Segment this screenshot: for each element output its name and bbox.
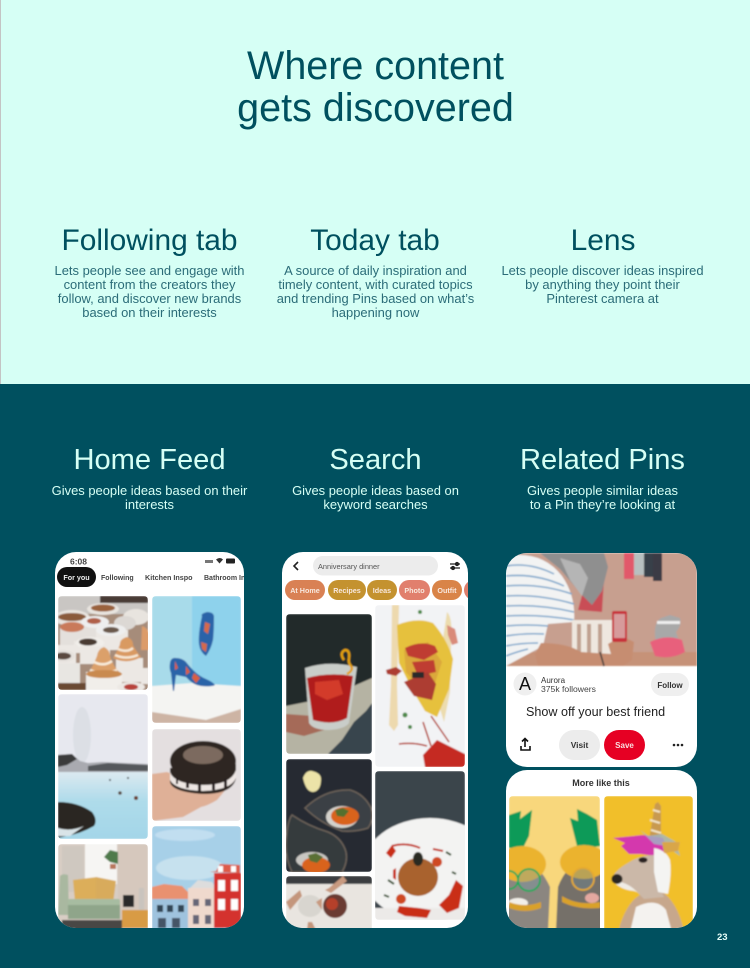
- save button: [604, 730, 645, 760]
- phone: Related Pins more like this card: [498, 770, 697, 932]
- text: Related Pins description: [527, 483, 678, 512]
- page number: 23: [717, 932, 728, 943]
- text: Today tab description: and trending Pins based on what’s: [277, 291, 474, 306]
- back arrow icon: [294, 562, 298, 570]
- text: Related Pins description: Gives people similar ideas: [527, 483, 678, 498]
- text: Following tab description: follow, and discover new brands: [58, 291, 241, 306]
- phone mockups: [55, 552, 697, 928]
- heading: Search: Search: [329, 444, 422, 476]
- photo: spaghetti plate: [375, 771, 465, 920]
- text: Today tab description: happening now: [332, 305, 419, 320]
- text: Home Feed description: Gives people ideas based on their: [52, 483, 247, 498]
- text: Following tab description: [55, 263, 244, 320]
- category chips: Photo: [404, 586, 425, 595]
- filter icon: [450, 562, 460, 570]
- text: Home Feed description: interests: [125, 497, 174, 512]
- text: Search description: Gives people ideas based on: [292, 483, 459, 498]
- category chips: Ideas: [373, 586, 391, 595]
- heading: Today tab: Today tab: [310, 224, 440, 257]
- creator row: A: [519, 674, 531, 694]
- tab bar: Following: [101, 575, 134, 582]
- text: Lens description: by anything they point their: [525, 277, 680, 292]
- phone: Search: [282, 552, 468, 928]
- category chips: At Home: [290, 586, 320, 595]
- category chips: Recipes: [333, 586, 361, 595]
- text: Home Feed description: [52, 483, 248, 512]
- tab bar: Bathroom Ins: [204, 575, 249, 582]
- photo: living room: [58, 844, 148, 934]
- category chips: [285, 580, 484, 600]
- category chips: Outfit: [437, 586, 457, 595]
- search bar: Anniversary dinner: [318, 562, 380, 571]
- photo: sharing table: [286, 876, 372, 932]
- photo: colorful town: [152, 826, 241, 934]
- text: Lens description: [501, 263, 704, 306]
- text: Following tab description: content from the creators they: [64, 277, 235, 292]
- tab bar: Kitchen Inspo: [145, 573, 193, 582]
- photo: lobster pasta: [375, 605, 465, 767]
- heading: Related Pins: Related Pins: [520, 444, 685, 476]
- phone: Home Feed: [51, 552, 249, 934]
- follow button: [651, 673, 689, 696]
- text: Lens description: Pinterest camera at: [546, 291, 659, 306]
- photo: blue lagoon: [58, 694, 148, 839]
- tab bar: For you: [63, 573, 90, 582]
- heading: Following tab: Following tab: [61, 224, 238, 257]
- text: Following tab description: based on their interests: [82, 305, 217, 320]
- photo: pineapple kittens: [509, 796, 600, 928]
- share icon: [521, 738, 530, 750]
- more icon: [673, 744, 683, 746]
- title: gets discovered: [237, 86, 514, 130]
- save button: Save: [615, 741, 634, 750]
- text: Search description: [292, 483, 459, 512]
- photo: red cocktail: [286, 614, 372, 754]
- text: Lens description: Lets people discover ideas inspired: [501, 263, 704, 278]
- photo: unicorn dog: [604, 796, 693, 932]
- status bar: [70, 558, 235, 564]
- title: [237, 44, 514, 130]
- dark background panel: [0, 384, 750, 968]
- text: Today tab description: timely content, with curated topics: [278, 277, 473, 292]
- photo: cupcakes: [58, 596, 148, 690]
- status bar: 6:08: [70, 556, 87, 566]
- follow button: Follow: [657, 681, 683, 690]
- tab bar: [57, 567, 249, 587]
- visit button: Visit: [571, 740, 588, 750]
- photo: high heel shoes: [152, 596, 241, 723]
- creator row: [514, 672, 596, 696]
- phone: Related Pins top card: [506, 553, 697, 767]
- visit button: [559, 730, 600, 760]
- title: Where content: [247, 44, 504, 88]
- photo: person photographing cat: [506, 553, 697, 666]
- heading: Lens: Lens: [571, 224, 635, 257]
- photo: chocolate cake: [152, 729, 241, 821]
- heading: More like this: More like this: [572, 778, 630, 788]
- search bar: [313, 556, 438, 576]
- pin title: Show off your best friend: [526, 705, 665, 719]
- creator row: Aurora: [541, 676, 566, 685]
- creator row: 375k followers: [541, 684, 596, 694]
- text: Related Pins description: to a Pin they’re looking at: [530, 497, 675, 512]
- text: Search description: keyword searches: [323, 497, 428, 512]
- photo: sushi bowls: [286, 759, 372, 873]
- heading: Home Feed: Home Feed: [73, 444, 226, 476]
- light background panel: [0, 0, 750, 384]
- text: Following tab description: Lets people see and engage with: [55, 263, 244, 278]
- text: Today tab description: [277, 263, 474, 320]
- text: Today tab description: A source of daily inspiration and: [284, 263, 467, 278]
